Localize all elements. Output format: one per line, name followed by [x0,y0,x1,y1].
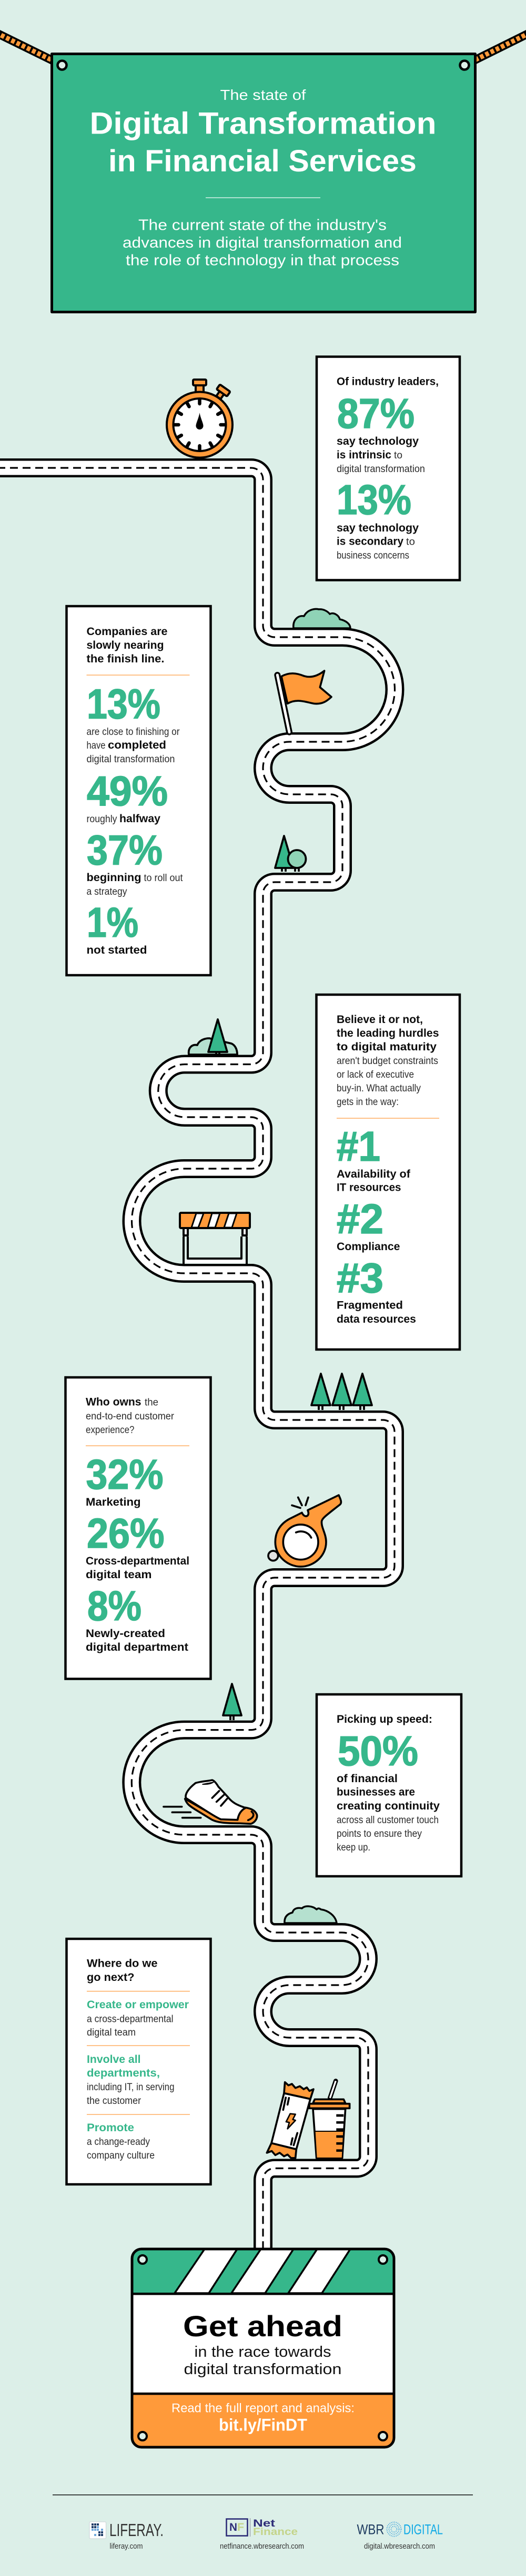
title [89,106,437,178]
stat: 13%: 13% [337,476,411,523]
icon: right eyelet [460,61,469,69]
item: create or empower [87,1999,189,2038]
icon: running shoe [164,1780,257,1824]
icon: left eyelet [58,61,66,69]
text: newly created: digital department [86,1641,188,1653]
link: bit.ly/FinDT: bit.ly/FinDT [219,2415,307,2434]
item: involve all departments: Involve all [87,2053,141,2066]
heading: the [145,1397,158,1408]
text: halfway: halfway [119,813,160,825]
text: halfway [86,813,160,825]
icon: bush [294,609,350,628]
logo: net finance: netfinance.wbresearch.com [220,2542,304,2551]
logo: net finance: F [237,2521,244,2533]
text: availability [337,1168,411,1193]
text: not started: not started [86,944,147,956]
text: secondary: is secondary [337,535,403,548]
text block: gets in the way: [337,1097,399,1108]
heading: Companies are [86,626,167,638]
stat: 1%: 1% [87,899,138,946]
heading [337,1014,439,1053]
icon: right rope [466,33,526,65]
text block [337,1056,438,1108]
green stripe header [132,2249,394,2294]
text: completed [86,727,180,765]
heading: go next? [87,1971,135,1984]
text: completed: digital transformation [86,754,175,765]
text: the state of: The state of [220,87,306,103]
logo: net finance: N [229,2521,237,2533]
icon: whistle [268,1495,341,1567]
stat: 8%: 8% [87,1582,141,1629]
panel: industry leaders [317,356,460,580]
stat: #1: #1 [337,1123,380,1170]
heading: Picking up speed: [337,1713,432,1725]
subtitle: the role of technology in that process [126,252,399,269]
item: involve all departments [87,2053,175,2107]
icon: three trees [311,1374,372,1410]
text: subheading [184,2344,342,2378]
heading: to digital maturity [337,1041,437,1053]
logo: liferay: liferay.com [109,2542,143,2551]
heading [87,1958,158,1984]
stat: 49%: 49% [87,768,168,814]
subtitle: The current state of the industry's [138,217,387,233]
panel: call to action sign [131,2249,395,2447]
item: create or empower: a cross-departmental [87,2013,174,2025]
heading: Where do we [87,1958,158,1969]
stat: 50%: 50% [338,1727,418,1774]
text: newly created [86,1628,188,1653]
item: create or empower: digital team [87,2027,136,2038]
text: cross-departmental [86,1555,189,1581]
item: involve all departments: departments, [87,2067,160,2079]
text: secondary: say technology [337,522,419,534]
text: continuity: of financial [337,1773,398,1785]
text: marketing: Marketing [86,1496,141,1508]
text: completed: are close to finishing or [86,727,180,738]
text: newly created: Newly-created [86,1628,165,1640]
text: completed: have [86,740,105,751]
logo: wbr digital: WBR [357,2521,384,2537]
text: intrinsic: digital transformation [337,464,425,475]
heading: slowly nearing [86,639,164,651]
road [0,468,394,2250]
stat: 37%: 37% [87,826,163,874]
logo: net finance: Net [253,2518,276,2529]
icon: flag [277,671,331,732]
text: availability: Availability of [337,1168,411,1180]
icon: tree [223,1684,241,1720]
icon: bush [285,1906,337,1923]
logo: wbr digital: digital.wbresearch.com [364,2542,435,2551]
text: fragmented: data resources [337,1313,416,1325]
heading [86,626,167,665]
text: beginning: to roll out [144,873,183,884]
icon: bush and tree [189,1019,237,1055]
text: secondary: business concerns [337,550,409,561]
item: promote [87,2122,155,2161]
item: promote: company culture [87,2150,155,2161]
text block: or lack of executive [337,1069,414,1080]
stat: #3: #3 [337,1254,383,1302]
text: continuity [337,1773,440,1853]
text: read the report: Read the full report and analysis: [171,2401,355,2415]
text: completed: completed [108,739,166,751]
stat: #2: #2 [337,1195,383,1242]
item: involve all departments: the customer [87,2095,141,2107]
text: compliance: Compliance [337,1241,400,1253]
icon: road barrier [180,1213,250,1264]
text: subheading: in the race towards [195,2344,331,2360]
title: in Financial Services [108,144,417,178]
text block: aren't budget constraints [337,1056,438,1067]
title: Digital Transformation [89,106,437,141]
panel: where next [66,1939,210,2184]
text: continuity: businesses are [337,1786,415,1798]
text: continuity: points to ensure they [337,1828,422,1839]
logo: liferay [89,2520,164,2551]
text: continuity: across all customer touch [337,1815,439,1826]
panel: hurdles [317,995,460,1350]
icon: energy bar and drink [267,2081,350,2158]
heading: end-to-end customer [86,1411,175,1422]
text: intrinsic: is intrinsic [337,449,391,461]
text: cross-departmental: digital team [86,1569,151,1581]
text: beginning: a strategy [86,886,127,897]
text: continuity: keep up. [337,1842,370,1853]
heading [86,1396,175,1436]
logo: net finance: Finance [253,2527,298,2538]
stat: 32%: 32% [86,1451,163,1498]
text: intrinsic [337,435,425,475]
heading: get ahead: Get ahead [183,2309,342,2343]
text: subheading: digital transformation [184,2361,342,2378]
item: promote: a change-ready [87,2137,150,2148]
text: secondary: to [406,536,415,548]
heading: Of industry leaders, [337,375,439,388]
panel: customer experience [65,1377,210,1679]
item: involve all departments: including IT, in serving [87,2082,175,2093]
text: fragmented [337,1300,416,1325]
heading: experience? [86,1425,135,1436]
logo: wbr digital [357,2521,443,2551]
icon: tree and round tree [275,836,306,872]
logo: net finance [220,2518,304,2551]
stat: 26%: 26% [87,1510,164,1557]
text: halfway: roughly [86,814,117,825]
panel: finish line [66,606,210,975]
text: fragmented: Fragmented [337,1300,403,1311]
text: continuity: creating continuity [337,1800,440,1812]
stat: 87%: 87% [337,390,414,437]
text: intrinsic: to [394,450,402,461]
item: create or empower: Create or empower [87,1999,189,2011]
stat: 13%: 13% [87,680,160,728]
text: cross-departmental: Cross-departmental [86,1555,189,1567]
panel: title banner [52,54,476,312]
icon: left rope [0,32,62,65]
subtitle: advances in digital transformation and [123,234,402,251]
item: promote: Promote [87,2122,134,2134]
text: intrinsic: say technology [337,435,419,447]
heading: Believe it or not, [337,1014,423,1026]
text: secondary [337,522,419,561]
icon: sign bolts [138,2255,387,2440]
heading: the leading hurdles [337,1027,439,1039]
text block: buy-in. What actually [337,1083,421,1094]
icon: stopwatch [167,380,232,457]
heading: the finish line. [86,653,164,665]
text: beginning: beginning [86,872,141,884]
panel: picking up speed [317,1694,461,1876]
logo: wbr digital: DIGITAL [403,2521,443,2537]
text: availability: IT resources [337,1182,401,1193]
logo: liferay: LIFERAY. [109,2520,164,2540]
text: beginning [86,872,183,897]
heading: Who owns [86,1396,141,1408]
subtitle [123,217,402,269]
